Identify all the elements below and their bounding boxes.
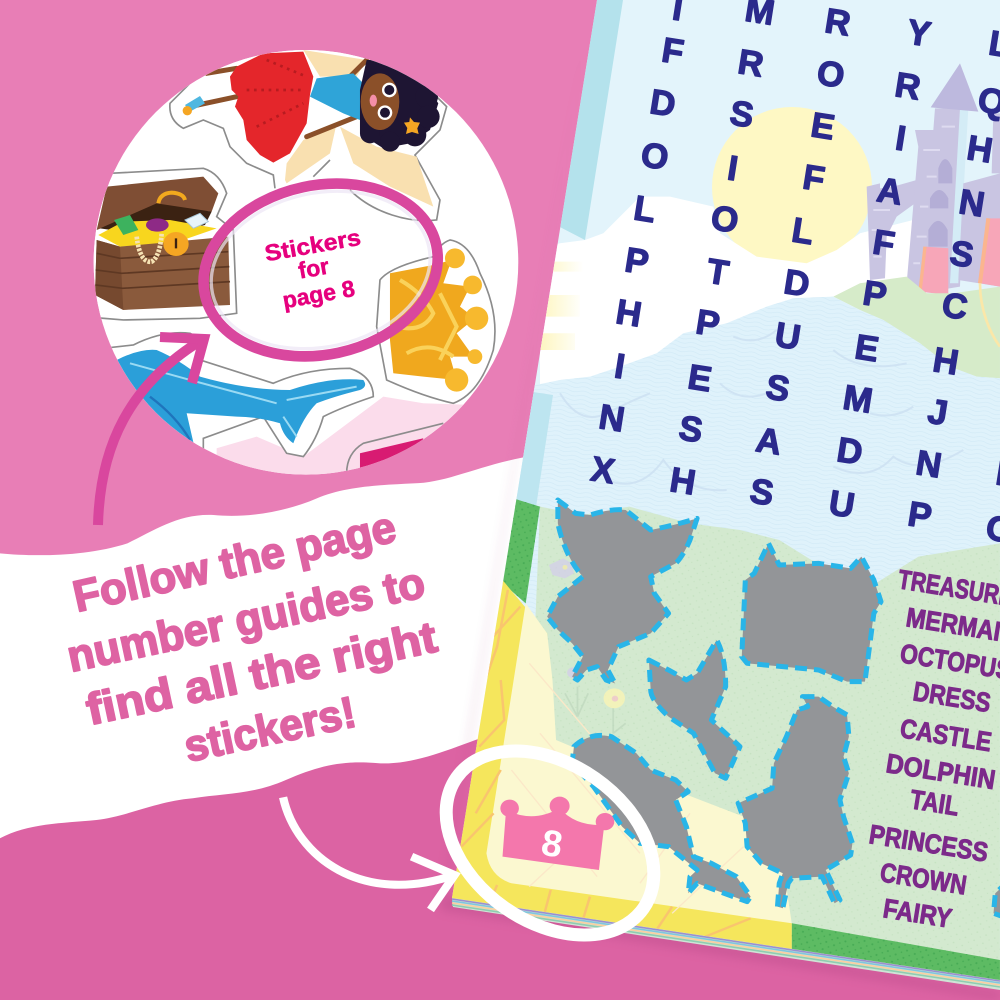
pink highlight ring — [187, 163, 454, 377]
main instruction text: find all the right — [82, 613, 442, 735]
silhouette: treasure chest — [742, 543, 881, 682]
castle — [867, 63, 1000, 295]
white arrow to page number — [283, 797, 455, 910]
silhouette: fairy — [547, 500, 697, 683]
word search letters: E — [852, 327, 881, 370]
word search letters: A — [874, 170, 905, 213]
word search letters: R — [735, 42, 766, 85]
word search letters: S — [763, 367, 792, 410]
pink sticker backing — [216, 396, 463, 475]
word search letters: I — [893, 118, 909, 159]
pink arrow to sticker label — [98, 337, 204, 525]
page sky — [440, 0, 1000, 1000]
word search letters: P — [622, 240, 651, 283]
word search letters: E — [685, 357, 714, 400]
background: lower darker pink — [0, 620, 1000, 1000]
page left border strip — [556, 0, 623, 240]
silhouette: tail — [649, 640, 740, 778]
water — [520, 297, 1000, 633]
word search letters: A — [753, 420, 784, 463]
word search letters: S — [747, 471, 776, 514]
word search letters: N — [596, 397, 627, 440]
meadow ground — [433, 498, 1000, 1000]
circle base — [94, 50, 518, 475]
yellow path border — [452, 580, 792, 949]
word search letters: S — [676, 408, 705, 451]
silhouette: partial right edge — [994, 882, 1000, 918]
word list — [867, 564, 1000, 934]
sticker label: for — [296, 253, 331, 284]
fairy dress — [230, 52, 313, 163]
word list: CROWN — [878, 857, 969, 901]
word search letters: P — [693, 302, 722, 345]
fairy limbs — [190, 60, 367, 137]
sticker: treasure chest — [83, 168, 237, 320]
word list: TAIL — [908, 784, 961, 822]
white clouds — [540, 197, 927, 400]
magnified sticker sheet circle — [83, 40, 523, 480]
fairy bodice — [310, 73, 363, 120]
word search letters: M — [840, 378, 875, 421]
word search letters: R — [822, 1, 853, 44]
word search letters: X — [588, 449, 618, 492]
sticker: crown — [377, 240, 495, 403]
page edge stack — [452, 898, 1000, 990]
word search letters: H — [964, 128, 995, 171]
background: upper pink — [0, 0, 1000, 620]
main instruction text: stickers! — [180, 688, 360, 772]
page number 8: 8 — [539, 822, 565, 866]
sticker: pink item — [347, 423, 443, 473]
word search letters: R — [892, 65, 923, 108]
word search letters: S — [727, 93, 756, 136]
word search letters: U — [826, 483, 857, 526]
ring inner glow — [196, 172, 445, 368]
sticker label: Stickers — [263, 224, 363, 266]
faint flowers — [549, 558, 626, 733]
word search letters: P — [905, 494, 934, 537]
stickers clipped to circle — [94, 50, 496, 475]
white highlight ring around page number — [411, 713, 689, 973]
sticker silhouettes — [547, 500, 1000, 918]
word search letters: L — [631, 189, 658, 230]
sun — [712, 107, 872, 267]
word search letters: F — [800, 158, 827, 199]
fairy shoe — [185, 96, 205, 112]
word list: FAIRY — [881, 893, 954, 934]
pale yellow path — [486, 603, 792, 923]
main instruction text: Follow the page — [69, 503, 400, 622]
word search letters: O — [638, 135, 671, 178]
word search letters: O — [814, 53, 847, 96]
word search letters: O — [708, 198, 741, 241]
path brick lines — [461, 590, 751, 940]
word search letters: I — [725, 148, 741, 189]
word search letters: P — [860, 273, 889, 316]
fairy hair — [360, 60, 440, 152]
word search letters: F — [659, 31, 686, 72]
word search letters: U — [772, 315, 803, 358]
green bottom border — [792, 923, 1000, 980]
word search letters: J — [925, 392, 950, 433]
left water border strip — [516, 392, 553, 507]
word search letters: H — [613, 292, 644, 335]
silhouette: dolphin — [572, 735, 751, 902]
white wave banner — [0, 455, 537, 838]
fairy face — [361, 73, 399, 130]
green left border — [499, 498, 540, 603]
word search letters: E — [808, 105, 837, 148]
word search letters: H — [667, 460, 698, 503]
word search letters: H — [930, 340, 961, 383]
word search letters: D — [834, 430, 865, 473]
word search letters: F — [870, 223, 897, 264]
main instruction text: number guides to — [63, 558, 429, 682]
sticker label: page 8 — [280, 275, 357, 313]
sticker: dolphin — [111, 332, 374, 458]
word search letters: T — [704, 252, 731, 293]
word search letters: C — [939, 285, 970, 328]
page shadow — [440, 0, 1000, 1000]
word search letters — [588, 0, 1000, 551]
word search letters: N — [913, 443, 944, 486]
book page — [433, 0, 1000, 1000]
fairy wings — [285, 50, 433, 207]
word search letters: L — [789, 211, 816, 252]
silhouette: mermaid — [738, 697, 852, 908]
word search letters: D — [647, 82, 678, 125]
page number crown — [500, 797, 614, 870]
sticker: fairy — [157, 40, 447, 221]
word search letters: S — [947, 233, 976, 276]
word search letters: I — [612, 346, 628, 387]
word search letters: Y — [904, 12, 933, 55]
main instruction text — [63, 503, 442, 772]
word search letters: D — [781, 262, 812, 305]
green hill — [833, 277, 1000, 378]
sticker label — [263, 224, 363, 313]
word search letters: N — [956, 182, 987, 225]
